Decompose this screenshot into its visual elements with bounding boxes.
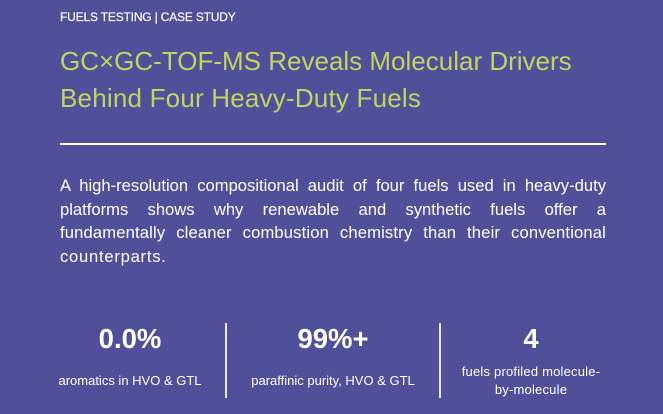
stat: fuels profiled xyxy=(462,323,600,397)
eyebrow label: FUELS TESTING | CASE STUDY xyxy=(60,10,236,24)
stat: fuels profiled: 4 xyxy=(523,323,539,354)
stat: fuels profiled: fuels profiled molecule- xyxy=(462,364,600,379)
stat: aromatics: 0.0% xyxy=(99,323,161,354)
stat: aromatics: aromatics in HVO & GTL xyxy=(58,373,202,388)
title xyxy=(60,46,572,113)
stat: paraffinic purity: paraffinic purity, HVO & GTL xyxy=(251,373,415,388)
title: GC×GC-TOF-MS Reveals Molecular Drivers xyxy=(60,46,572,76)
stat: aromatics xyxy=(58,323,202,388)
stat: fuels profiled: by-molecule xyxy=(495,382,567,397)
intro paragraph: A high-resolution compositional audit of four fuels used in heavy-duty xyxy=(60,176,606,195)
intro paragraph: platforms shows why renewable and synthetic fuels offer a xyxy=(60,200,606,219)
intro paragraph xyxy=(60,176,606,266)
stat divider 2 xyxy=(439,323,441,398)
stat: paraffinic purity xyxy=(251,323,415,388)
stat divider 1 xyxy=(225,323,227,398)
intro paragraph: counterparts. xyxy=(60,247,167,266)
title: Behind Four Heavy-Duty Fuels xyxy=(60,83,421,113)
header rule xyxy=(60,143,606,145)
stat: paraffinic purity: 99%+ xyxy=(297,323,369,354)
intro paragraph: fundamentally cleaner combustion chemistry than their conventional xyxy=(60,223,606,242)
